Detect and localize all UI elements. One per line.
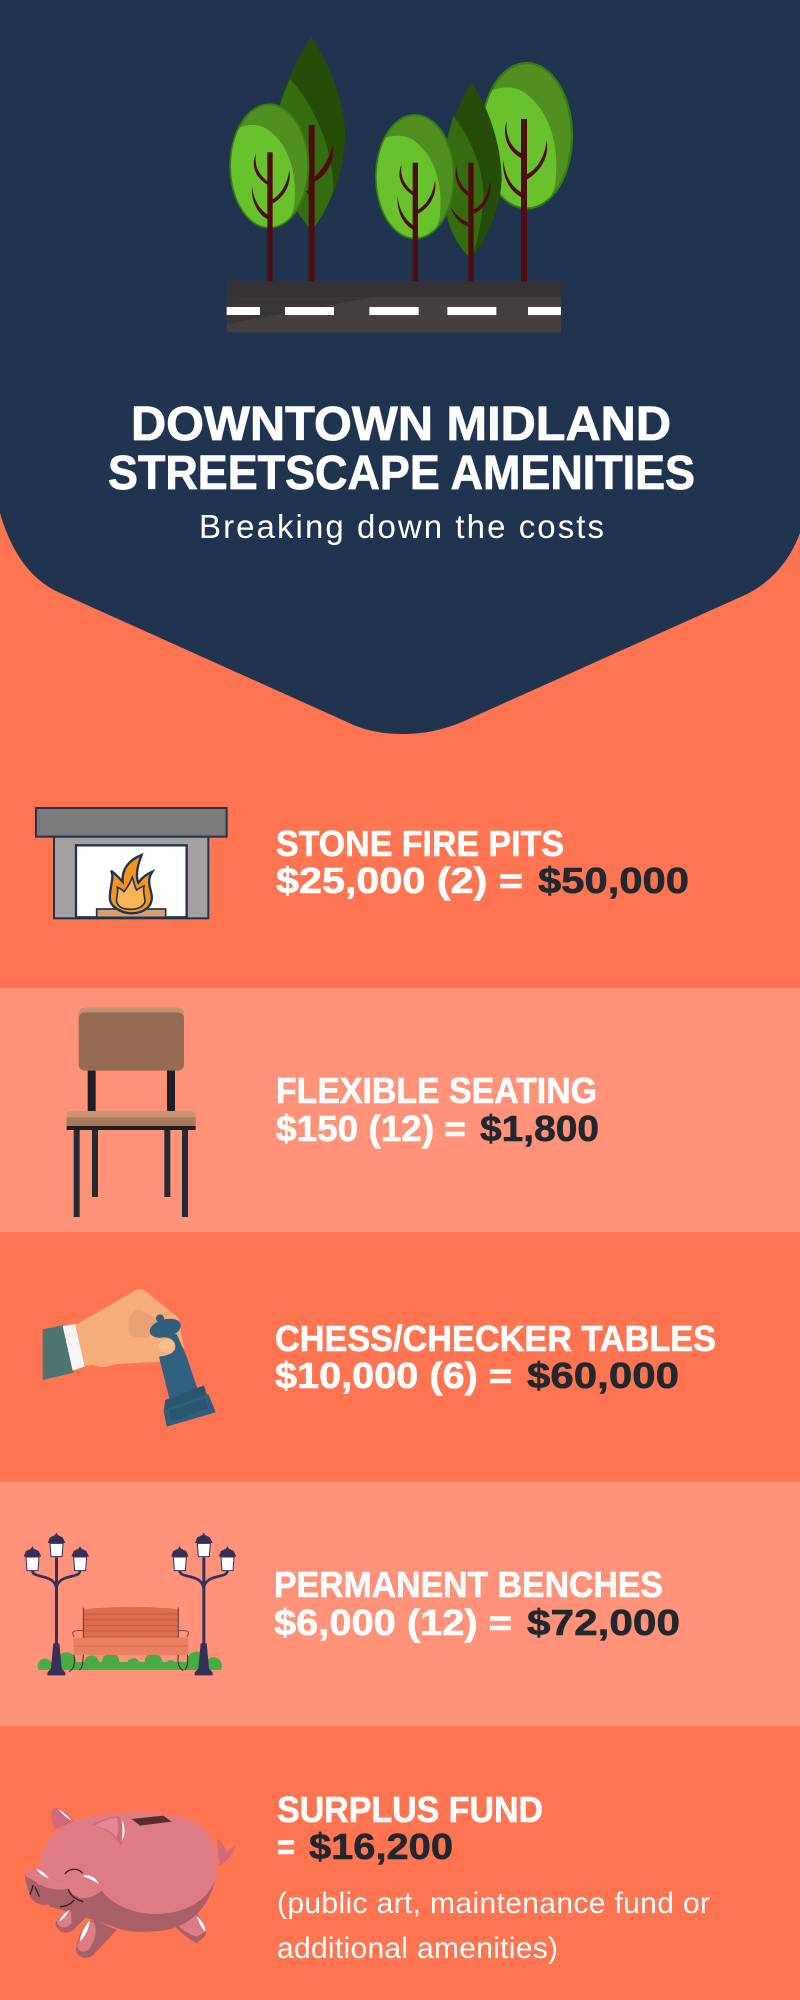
lamp left bbox=[24, 1533, 89, 1675]
cost formula: $25,000 (2) = bbox=[276, 860, 523, 901]
panel: flexible seating bbox=[0, 988, 800, 1232]
total: $60,000 bbox=[527, 1355, 679, 1396]
total: $1,800 bbox=[480, 1108, 599, 1149]
bushes bbox=[38, 1652, 222, 1670]
bench bbox=[69, 1607, 189, 1672]
title: STREETSCAPE AMENITIES bbox=[108, 447, 695, 500]
heading: stone fire pits: STONE FIRE PITS bbox=[276, 823, 564, 864]
panel: permanent benches bbox=[0, 1482, 800, 1726]
heading: surplus fund: SURPLUS FUND bbox=[277, 1789, 543, 1830]
note bbox=[277, 1887, 710, 1965]
total: $72,000 bbox=[527, 1602, 680, 1643]
heading: permanent benches: PERMANENT BENCHES bbox=[274, 1564, 663, 1605]
tree: round right large bbox=[477, 63, 572, 282]
note: additional amenities) bbox=[277, 1932, 558, 1965]
panel: stone fire pits bbox=[0, 734, 800, 988]
icon: piggy bank bbox=[25, 1808, 236, 1958]
road bbox=[227, 282, 561, 332]
note: (public art, maintenance fund or bbox=[277, 1887, 710, 1920]
icon: bench with street lamps bbox=[24, 1533, 236, 1675]
tree: tall dark leaf left bbox=[275, 37, 345, 282]
total: $16,200 bbox=[309, 1826, 453, 1867]
heading: flexible seating: FLEXIBLE SEATING bbox=[276, 1070, 597, 1111]
lamp right bbox=[171, 1533, 236, 1675]
total: $50,000 bbox=[538, 860, 689, 901]
subtitle: Breaking down the costs bbox=[199, 508, 604, 545]
icon: chair bbox=[67, 1007, 196, 1217]
icon: fireplace bbox=[36, 808, 227, 918]
title bbox=[108, 398, 695, 500]
panel: chess/checker tables bbox=[0, 1232, 800, 1482]
cost formula: $6,000 (12) = bbox=[274, 1602, 512, 1643]
equals sign: = bbox=[277, 1826, 295, 1867]
heading: chess/checker tables: CHESS/CHECKER TABLES bbox=[275, 1318, 716, 1359]
tree: round center bbox=[372, 115, 454, 282]
icon: hand holding chess piece bbox=[43, 1289, 216, 1427]
header panel bbox=[0, 0, 800, 734]
cost formula: $150 (12) = bbox=[276, 1108, 466, 1149]
panel: surplus fund bbox=[0, 1726, 800, 2000]
tree: round left bbox=[227, 104, 308, 282]
cost formula: $10,000 (6) = bbox=[275, 1355, 512, 1396]
title: DOWNTOWN MIDLAND bbox=[131, 398, 671, 451]
illustration: trees and road bbox=[227, 37, 572, 332]
tree: tall dark leaf right bbox=[442, 83, 502, 282]
